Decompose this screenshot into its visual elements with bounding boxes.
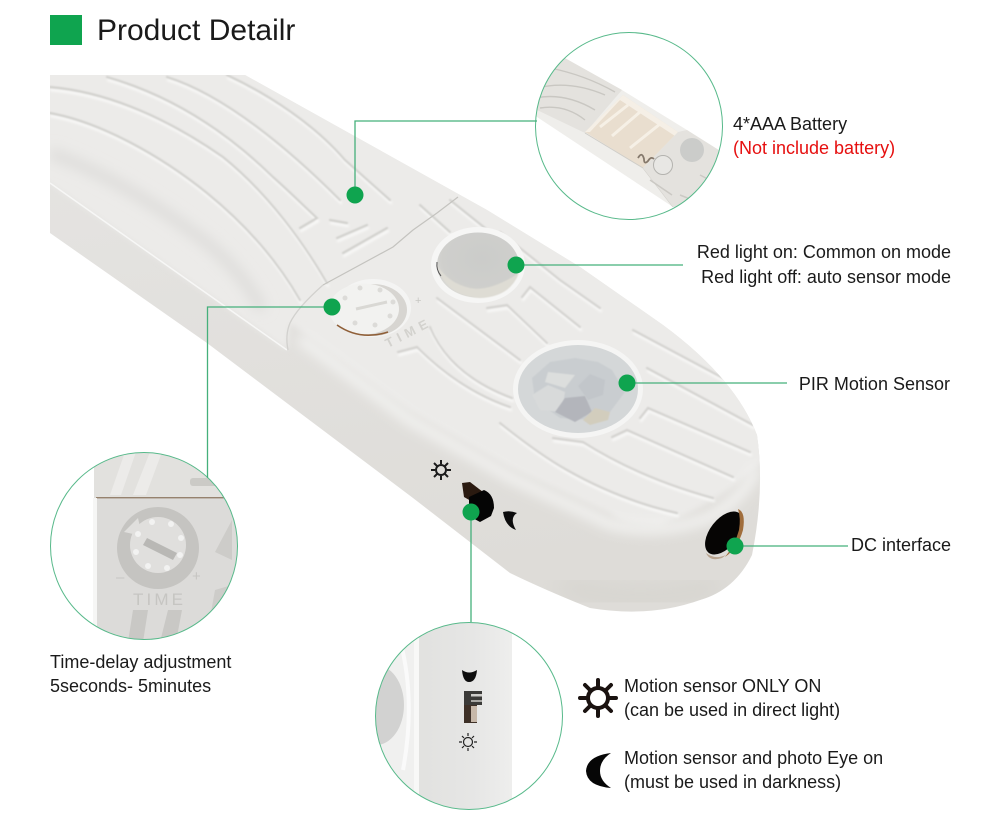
cover side seam [50,183,287,350]
cover piece [538,58,622,133]
callout: time-delay inset: – [116,569,125,586]
label: sensor and photo eye: Motion sensor and photo Eye on [624,748,883,768]
callout: time-delay inset: + [192,568,201,585]
label: sensor only: Motion sensor ONLY ON [624,676,821,696]
soft highlights [300,338,757,529]
icon: sun on device [431,460,451,480]
title: Product Detailr [97,14,295,47]
product photo: sensor light body [40,60,770,620]
ridges on back section [50,75,490,300]
callout: time-delay inset: TIME [133,590,183,609]
leader: LED [516,264,683,266]
top face [50,131,760,522]
callout: switch inset [375,622,563,810]
label: time-delay: 5seconds- 5minutes [50,676,211,696]
icon: sun in inset [459,733,477,751]
label: sensor only [624,676,840,720]
label: LED modes [697,242,951,287]
heading marker: green square [50,15,82,45]
callout: battery inset [530,32,735,220]
label: PIR: PIR Motion Sensor [799,374,950,394]
label: time-delay: Time-delay adjustment [50,652,231,672]
leader: battery [355,121,537,195]
label: LED modes: Red light on: Common on mode [697,242,951,262]
slide switch [462,482,494,522]
time dial: TIME [383,316,431,351]
callout: time-delay inset [50,452,238,644]
leader: switch [470,512,472,622]
icon: moon [586,753,611,788]
open battery bay [586,100,674,168]
label: battery [733,114,895,158]
leader: DC [735,545,848,547]
leader: PIR [627,382,787,384]
outer device shape [536,90,686,206]
label: sensor and photo eye: (must be used in darkness) [624,772,841,792]
marker dots [324,186,744,554]
label: sensor only: (can be used in direct light) [624,700,840,720]
icon: moon on device [503,511,517,530]
label: LED modes: Red light off: auto sensor mode [701,267,951,287]
front piece [643,130,719,207]
seam of battery cover [323,197,458,285]
label: sensor and photo eye [624,748,883,792]
label: battery: 4*AAA Battery [733,114,847,134]
label: time-delay [50,652,231,696]
ridges on front section [398,232,753,513]
side face [50,182,760,612]
leader: time [208,307,332,478]
PIR motion sensor dome [513,340,643,438]
LED indicator lens [431,227,525,303]
time dial [336,279,428,346]
label: DC: DC interface [851,535,951,555]
time dial: + [415,295,421,307]
label: battery: (Not include battery) [733,138,895,158]
DC jack [705,509,744,560]
icon: sun [580,680,616,716]
icon: moon in inset [462,670,477,682]
